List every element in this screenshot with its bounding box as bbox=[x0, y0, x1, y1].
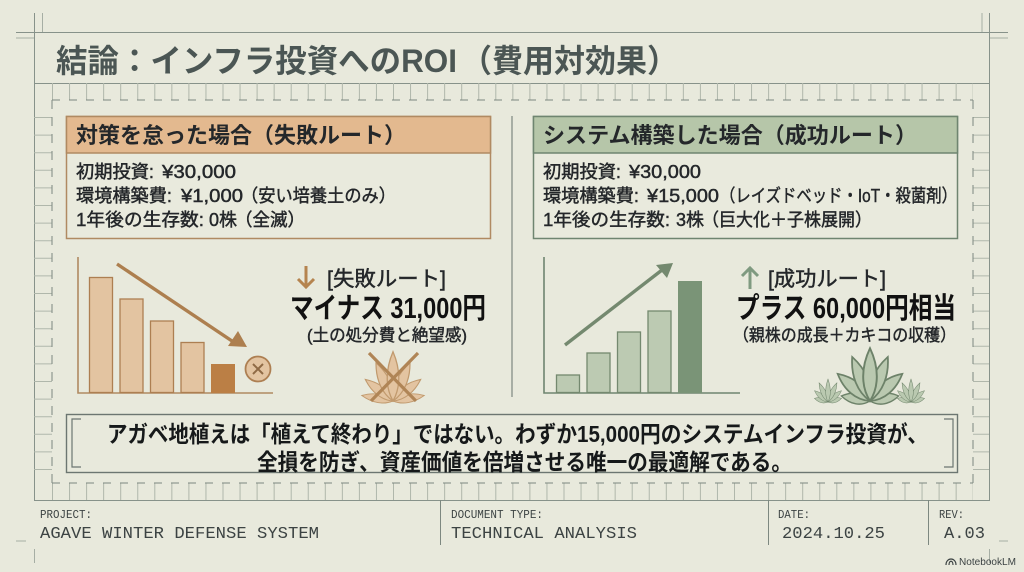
success details: 1年後の生存数: bbox=[543, 210, 670, 230]
document type field: DOCUMENT TYPE: bbox=[451, 508, 543, 522]
success result callout: （親株の成長＋カキコの収穫） bbox=[733, 326, 956, 345]
success details: （巨大化＋子株展開） bbox=[702, 210, 872, 230]
failure result callout: (土の処分費と絶望感) bbox=[307, 326, 467, 345]
failure details bbox=[76, 162, 396, 230]
date field: 2024.10.25 bbox=[782, 525, 885, 544]
conclusion text bbox=[107, 421, 928, 475]
title: 結論：インフラ投資へのROI bbox=[56, 43, 457, 79]
icon: NotebookLM mark bbox=[946, 559, 956, 565]
callout: conclusion bbox=[66, 414, 958, 475]
bar chart: success growth bbox=[544, 257, 740, 393]
NotebookLM badge: NotebookLM bbox=[959, 556, 1016, 568]
success heading: システム構築した場合（成功ルート） bbox=[543, 123, 917, 148]
success header band bbox=[534, 116, 958, 153]
conclusion text: わずか bbox=[515, 421, 577, 447]
failure details: （安い培養土のみ） bbox=[241, 186, 396, 206]
failure details: （全滅） bbox=[235, 210, 305, 230]
failure result callout bbox=[290, 266, 486, 345]
arrow: growth trend bbox=[565, 263, 673, 345]
footer: title block bbox=[40, 500, 985, 545]
failure heading: 対策を怠った場合（失敗ルート） bbox=[76, 123, 406, 148]
revision field: REV: bbox=[939, 508, 964, 522]
icon: withered agave crossed out bbox=[361, 352, 425, 405]
success details: 3株 bbox=[676, 210, 704, 230]
failure result callout: [失敗ルート] bbox=[327, 268, 446, 291]
failure details: 1年後の生存数: bbox=[76, 210, 204, 230]
project field: PROJECT: bbox=[40, 508, 92, 522]
success result callout: プラス 60,000円相当 bbox=[736, 292, 956, 325]
bar chart: failure decline bbox=[78, 257, 273, 393]
success details: （レイズドベッド・IoT・殺菌剤） bbox=[720, 186, 957, 206]
panel: failure route summary bbox=[66, 116, 490, 238]
project field bbox=[40, 508, 319, 544]
arrow: decline trend bbox=[117, 264, 247, 347]
failure result callout: マイナス 31,000円 bbox=[290, 293, 486, 325]
success result callout bbox=[733, 268, 956, 345]
success result callout: [成功ルート] bbox=[768, 268, 886, 291]
date field: DATE: bbox=[778, 508, 810, 522]
title bbox=[56, 43, 678, 79]
icon: healthy agave with offsets bbox=[813, 348, 926, 406]
failure details: 初期投資: bbox=[76, 162, 154, 182]
revision field bbox=[939, 508, 985, 544]
success details: ¥15,000 bbox=[646, 186, 719, 206]
icon: failure cross bbox=[246, 356, 270, 382]
conclusion text: 全損を防ぎ、資産価値を倍増させる唯一の最適解である。 bbox=[257, 449, 792, 475]
document type field: TECHNICAL ANALYSIS bbox=[451, 525, 637, 544]
icon: down arrow bbox=[298, 266, 314, 287]
success details: 環境構築費: bbox=[543, 186, 639, 206]
success details: 初期投資: bbox=[543, 162, 621, 182]
success details bbox=[543, 162, 957, 230]
revision field: A.03 bbox=[944, 525, 985, 544]
date field bbox=[778, 508, 885, 544]
conclusion text: アガベ地植えは「植えて終わり」ではない。 bbox=[107, 421, 515, 447]
title: （費用対効果） bbox=[461, 43, 678, 79]
failure details: 0株 bbox=[209, 210, 237, 230]
document type field bbox=[451, 508, 637, 544]
failure details: 環境構築費: bbox=[76, 186, 172, 206]
icon: up arrow bbox=[742, 268, 758, 289]
panel: success route summary bbox=[534, 116, 958, 238]
success details: ¥30,000 bbox=[628, 162, 701, 182]
project field: AGAVE WINTER DEFENSE SYSTEM bbox=[40, 525, 319, 544]
failure details: ¥30,000 bbox=[161, 162, 236, 182]
conclusion text: 15,000 bbox=[577, 421, 640, 447]
failure header band bbox=[66, 116, 490, 153]
failure details: ¥1,000 bbox=[180, 186, 243, 206]
conclusion text: 円のシステムインフラ投資が、 bbox=[640, 421, 928, 447]
